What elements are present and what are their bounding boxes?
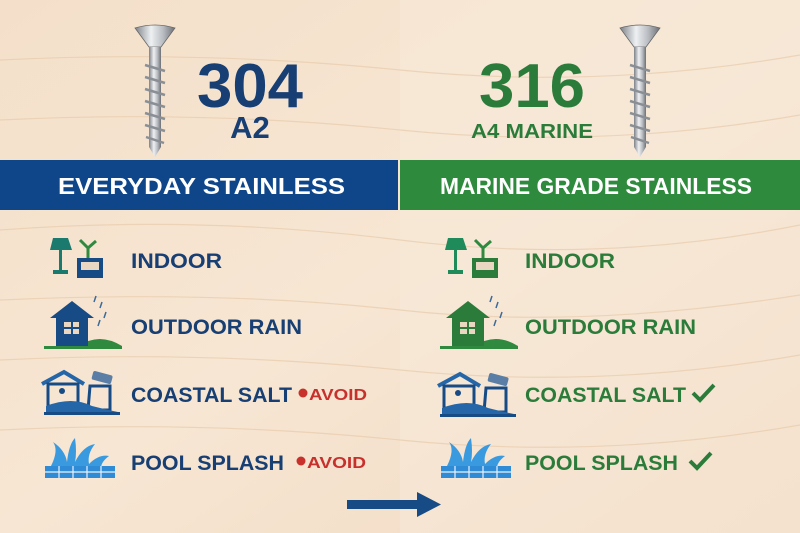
left icon: pool splash [45, 438, 115, 478]
left icon: outdoor rain [44, 296, 122, 349]
right icon: indoor [445, 238, 498, 278]
check: pool [690, 453, 711, 468]
left text: pool splash: POOL SPLASH [131, 452, 284, 475]
avoid label: pool: AVOID [307, 455, 366, 472]
banner: everyday stainless: EVERYDAY STAINLESS [58, 173, 345, 199]
banner: marine grade stainless: MARINE GRADE STAINLESS [440, 173, 752, 199]
arrow [347, 492, 441, 517]
heading: 316 A4 MARINE: A4 MARINE [471, 121, 593, 143]
right text: pool splash: POOL SPLASH [525, 452, 678, 475]
left icon: indoor [50, 238, 103, 278]
left text: coastal salt: COASTAL SALT [131, 384, 292, 407]
right text: coastal salt: COASTAL SALT [525, 384, 686, 407]
heading: 316 A4 MARINE: 316 [479, 52, 585, 121]
check: coastal [693, 385, 714, 400]
right icon: coastal salt [438, 373, 516, 417]
left text: indoor: INDOOR [131, 250, 222, 273]
banner: everyday stainless [0, 160, 398, 210]
right icon: outdoor rain [440, 296, 518, 349]
right icon: pool splash [441, 438, 511, 478]
right text: indoor: INDOOR [525, 250, 615, 273]
heading: 316 A4 MARINE [471, 52, 593, 143]
avoid label: coastal: AVOID [309, 387, 367, 404]
heading: 304 A2: 304 [197, 52, 304, 121]
screw left [135, 25, 175, 157]
screw right [620, 25, 660, 157]
left text: outdoor rain: OUTDOOR RAIN [131, 316, 302, 339]
heading: 304 A2: A2 [230, 110, 270, 145]
right text: outdoor rain: OUTDOOR RAIN [525, 316, 696, 339]
left icon: coastal salt [42, 371, 120, 415]
banner: marine grade stainless [400, 160, 800, 210]
